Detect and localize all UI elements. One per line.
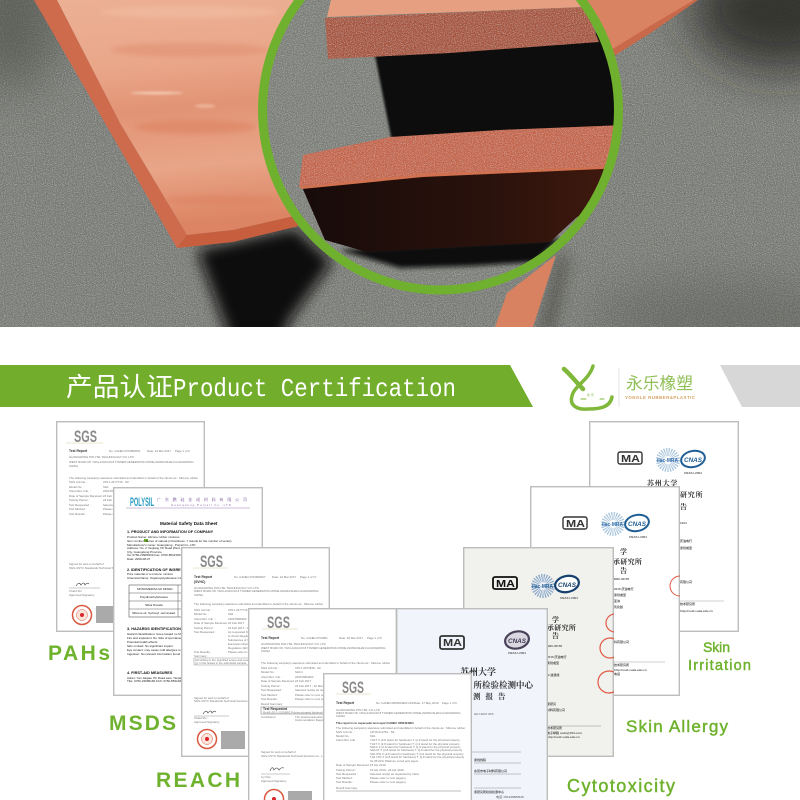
certificate: SGS report 4: Client Ref. Info. : <box>261 675 283 679</box>
certificate: REACH SGS report: Testing Period : <box>194 626 214 630</box>
certificate: skin allergy report: 2016 庆油电行 <box>614 586 634 591</box>
certificate: SGS report 5: LIP19-212761 - SZ <box>370 730 395 734</box>
certificate: SGS report 4: CP17-2077848 - SZ <box>295 666 321 670</box>
certificate: REACH SGS report: CP17-2477716 - SZ <box>228 608 254 612</box>
certificate: SGS report 5 <box>323 673 472 800</box>
certificate: skin irritation report: 苏州大学 <box>647 478 678 488</box>
black shadow between foam sheets <box>374 31 614 137</box>
certificate: MSDS sheet: Chemical Name: Organopolysiloxane mixture <box>127 576 188 580</box>
certificate: MSDS sheet: TEL: 0760-23989160 FAX: 0760-85321801 <box>127 679 185 683</box>
certificate: SGS report 4: Date of Sample Received : <box>261 679 296 683</box>
logo chinese name: 永乐橡塑 <box>626 374 693 393</box>
lower foam sheet <box>299 125 625 189</box>
certificate: REACH SGS report: CHINA <box>194 593 203 597</box>
certificate: SGS report 4: Model No. : <box>261 670 276 674</box>
certificate: REACH SGS report: SGS Job No. : <box>194 608 213 612</box>
certificate: MSDS sheet: Item number: Series of natural (x=hardness, Y stands for the number of series) <box>127 539 232 543</box>
certificate: skin irritation report: 素烧成型 <box>680 545 692 550</box>
certificate: MSDS sheet: Ingestion: No relevant information found <box>127 652 181 656</box>
certificate: cytotoxicity front report: 素线线程 <box>474 757 486 762</box>
heading banner <box>0 365 533 407</box>
sheet shadow <box>197 228 332 345</box>
certificate: PAHs SGS report: Test Requested : <box>69 503 91 507</box>
certificate: REACH SGS report: (y) in the tested in the submitted sample. <box>195 661 247 665</box>
certificate: SGS report 4: Test Requested <box>263 707 287 711</box>
label: Skin Irritation: Skin <box>703 639 730 655</box>
certificate: PAHs SGS report: WEST ROAD OF YAN,HUAN,NO.8 TOWER GENERATION ZONE,ZHONGSHAN,GUANGDONG <box>69 460 194 464</box>
certificate: SGS report 5: Client Ref. Info. : <box>336 738 358 742</box>
certificate: SGS report 5: TH1 LTR X (2-8 stand for hardness) T, Q-9 stand for the physical property <box>370 755 465 759</box>
certificate: PAHs SGS report: Date: 24 Mar 2017 <box>147 449 171 453</box>
certificate: SGS report 4: Test Requested : <box>261 688 283 692</box>
certificate: SGS report 4: Test Method : <box>261 693 279 697</box>
certificate: MSDS sheet: Address: No. 2 Yanjiang 7th Road West, Yanjiang Industrial Zone, Zhongshan <box>127 546 230 550</box>
certificate: MSDS sheet: Polydimethylsiloxane <box>140 595 168 599</box>
certificate: cytotoxicity background report: 学 <box>552 615 559 624</box>
certificate: skin allergy report: 告 <box>620 566 627 575</box>
certificate: skin irritation report: 研究所 <box>680 490 703 499</box>
certificate: SGS report 4: Approved Signatory <box>261 779 287 783</box>
certificate: SGS report 5: SH1G X (2-8 stand for hardness) T, Q-9 stand for the physical property <box>370 745 461 749</box>
certificate: PAHs SGS report: Signed for and on behalf of <box>69 562 104 566</box>
certificate: SGS report 4: The following sample(s) was/were submitted and identified in behalf of the clients as : Silicone rubber <box>261 661 390 665</box>
certificate: REACH SGS report: SGS-CSTC Standards Technical Services Co., Ltd <box>194 699 259 703</box>
certificate: PAHs SGS report: Test Report <box>69 449 88 453</box>
accreditation marks: ilac-MRA <box>657 458 678 464</box>
certificate: PAHs SGS report: CP17-2477716 - SZ <box>103 480 129 484</box>
certificate: SGS report 5: YH1T X (2-8 stand for hardness) T, Q-9 stand for the physical property <box>370 738 460 742</box>
certificate: SGS report 4: SGS Job No. : <box>261 666 280 670</box>
certificate: MSDS sheet: 2. IDENTIFICATION OF INGREDIENTS <box>127 568 195 572</box>
certificate: PAHs SGS report: Please refer to next <box>103 507 128 511</box>
certificate: MSDS sheet: Silicone oil, hydroxyl -terminated <box>132 611 176 615</box>
strip shadow <box>538 255 570 335</box>
certificate: SGS report 5: Date: 27 May 2019 <box>414 701 439 705</box>
accreditation marks <box>493 574 580 600</box>
certificate: REACH SGS report: Regulation (EC) No 1907/2006 <box>228 646 268 650</box>
certificate: SGS report 5: Please refer to next page(s) <box>370 776 406 780</box>
certificate: SGS report 4: Please refer to next pages <box>295 697 329 701</box>
label: Skin Irritation: Irritation <box>688 658 751 674</box>
certificate: PAHs SGS report: Chaid Shi <box>69 589 82 593</box>
certificate: SGS report 4: Test Report <box>261 636 280 640</box>
certificate: skin allergy report: M20-40155 <box>614 577 630 581</box>
certificate: REACH SGS report: Model No. : <box>194 612 209 616</box>
label: Cytotoxicity: Cytotoxicity <box>567 776 675 796</box>
certificate: skin allergy report: 科有限公司 <box>614 639 629 644</box>
certificate: SGS report 4: Result Summary <box>261 702 283 706</box>
label: PAHs: PAHs <box>48 642 110 665</box>
certificate: cytotoxicity background report: 2016 庆油电行 <box>547 654 567 659</box>
certificate: MSDS sheet: POLYSIL <box>130 497 154 509</box>
certificate: MSDS sheet: 4. FIRST-AID MEASURES <box>127 671 173 675</box>
magnifier lens: foam cross-section close-up <box>250 0 630 300</box>
accreditation marks: CNAS <box>628 521 647 528</box>
certificate: MSDS sheet: 广东鹏硅化成材料有限公司 <box>157 496 247 502</box>
certificate: SGS report 4: No. CANEC1703961 <box>301 636 328 640</box>
certificate: SGS report 4 <box>248 608 396 800</box>
certificate: SGS report 4: Signed for and on behalf of <box>261 750 296 754</box>
accreditation marks: CNAS <box>508 638 527 645</box>
accreditation marks: CNAS <box>684 457 703 464</box>
certificate: skin irritation report: 庆油电行 <box>680 538 692 543</box>
certificate: PAHs SGS report <box>56 421 205 632</box>
certificate: SGS report 4: SH1U <box>295 670 303 674</box>
certificate: SGS report 5: Selected test(s) as requested by client <box>370 772 419 776</box>
certificate: SGS report 5: Date of Sample Received : <box>336 763 371 767</box>
certificate: MSDS sheet <box>113 487 263 696</box>
certificate: MSDS sheet: City, Guangdong Province <box>127 550 162 554</box>
certificate: PAHs SGS report: SH1 <box>103 485 109 489</box>
certificate: SGS report 4: Ivy Pan <box>261 775 271 779</box>
certificate: PAHs SGS report: CHINA <box>69 464 78 468</box>
product photo: silicone foam sheets on grey surface <box>0 0 800 360</box>
certificate: SGS report 5: Please refer to next page(s) <box>370 780 406 784</box>
banner title latin: Product Certification <box>173 374 456 404</box>
certificate: REACH SGS report: WEST ROAD OF YAN,HUAN,NO.8 TOWER GENERATION ZONE,ZHONGSHAN,GUANGDONG <box>194 589 319 593</box>
certificate: SGS report 4: RoHS (EU) 2015/863 Polybrominated biphenyl <box>263 710 323 714</box>
label: Skin Irritation <box>688 639 751 674</box>
certificate: REACH SGS report: 2200 8005460 <box>228 617 247 621</box>
certificate: SGS report 5: SH1 <box>370 734 376 738</box>
accreditation marks <box>618 449 706 475</box>
certificate: PAHs SGS report: Date of Sample Received : <box>69 494 104 498</box>
certificate: PAHs SGS report: 24 Feb 2017 <box>103 494 120 498</box>
certificate: cytotoxicity front report: 电话: 051265880628 <box>496 794 524 799</box>
certificate: skin irritation report: 有限公司 <box>680 579 692 584</box>
certificate: SGS report 4: Please refer to next pages <box>295 693 329 697</box>
certificate: SGS report 5: Page 1 of 6 <box>442 701 457 705</box>
certificate: PAHs SGS report: Model No. : <box>69 485 84 489</box>
accreditation marks: MA <box>566 519 585 530</box>
certificate: skin allergy report: 技术研究所 <box>614 662 629 667</box>
certificate: SGS report 5: Test Method : <box>336 776 354 780</box>
lower foam sheet dark side <box>302 166 625 252</box>
top right sheet <box>585 0 698 56</box>
certificate: SGS report 4: Date: 02 Mar 2017 <box>339 636 363 640</box>
certificate: MSDS sheet: Pure material or a mixture: mixture <box>127 572 173 576</box>
certificate: SGS report 4: 2200 8004464 <box>295 675 314 679</box>
certificate: SGS report 5: WEST ROAD OF YAN,HUAN,NO.8 TOWER GENERATION ZONE,ZHONGSHAN,GUANGDONG <box>336 711 461 715</box>
certificate: SGS report 5: 15 Apr 2019 <box>370 763 386 767</box>
certificate: MSDS sheet: Adres: Yan Jiaqiao 7th Road east, Yanjiang Industrial Zone <box>127 676 205 680</box>
top foam sheet <box>325 0 599 59</box>
certificate: PAHs SGS report: SGS-CSTC Standards Technical Services Co. <box>69 566 128 570</box>
large orange sheet <box>34 0 310 248</box>
certificate: SGS report 5: Model No. : <box>336 734 351 738</box>
certificate: PAHs SGS report: Please refer to next <box>103 512 128 516</box>
certificate: cytotoxicity background report: 材料有限公司 <box>547 707 565 712</box>
certificate: skin allergy report: 学 <box>620 547 627 556</box>
certificate: REACH SGS report: Page 1 of 17 <box>300 575 317 579</box>
certificate: REACH SGS report: (SVHC) <box>194 580 205 584</box>
certificate: SGS report 4: The tested parameters comply <box>295 715 335 719</box>
certificate: MSDS sheet: Fire and explosion: No risks of spontaneous combustion <box>127 636 202 640</box>
certificate: PAHs SGS report: Approved Signatory <box>69 593 95 597</box>
lower dark face shadow <box>340 238 560 268</box>
certificate: REACH SGS report <box>181 547 330 757</box>
certificate: skin irritation report: http://ssdi.suda.edu.cn <box>680 609 713 613</box>
company logo <box>564 366 696 409</box>
certificate: REACH SGS report: The following sample(s) was/were submitted and identified in behalf of the clients as : Silicone rubber <box>194 602 323 606</box>
certificate: SGS report 5: SH1 PW X (2-8 stand for hardness) T, Q-9 stand for the physical property <box>370 752 464 756</box>
accreditation marks: CNAS L2004 <box>629 535 647 539</box>
certificate: cytotoxicity front report: 苏州大学 <box>460 666 496 677</box>
certificate: skin irritation report <box>589 421 739 632</box>
certificate: SGS report 4: Conclusion: <box>261 715 276 719</box>
company logo: 永 乐 <box>587 392 594 397</box>
certificate: MSDS sheet: Potential health effects: <box>127 640 158 644</box>
certificate: REACH SGS report: Date of Sample Received : <box>194 621 229 625</box>
label: Skin Allergy: Skin Allergy <box>626 717 728 736</box>
certificate: MSDS sheet: Silica Dioxide <box>145 603 163 607</box>
logo mark <box>564 366 612 409</box>
lower strip <box>495 255 556 327</box>
certificate: SGS report 4: GUANGDONG POLYSIL TECHNOLOGY CO.,LTD <box>261 642 326 646</box>
certificate: SGS report 5: SH1GT X (2-8 stand for hardness) T, Q-9 stand for the physical property <box>370 748 463 752</box>
certificate: PAHs SGS report: GUANGDONG POLYSIL TECHNOLOGY CO.,LTD <box>69 455 134 459</box>
accreditation marks: MA <box>621 454 640 465</box>
certificate: MSDS sheet: Product Name: silicone rubber mixtures <box>127 535 180 539</box>
certificate: SGS report 4: 24 Feb 2017 <box>295 679 312 683</box>
certificate: PAHs SGS report: Test Results : <box>69 512 87 516</box>
certificate: skin allergy report: http://ssdi.suda.edu.cn <box>614 668 647 672</box>
certificate: cytotoxicity front report: 测报告 <box>473 691 510 701</box>
certificate: SGS report 4: Test Results : <box>261 697 279 701</box>
certificate: cytotoxicity background report: 告 <box>552 631 559 640</box>
certificate: SGS report 4: 24 Feb 2017 - 02 Mar 2017 <box>295 684 330 688</box>
certificate: PAHs SGS report: Client Ref. Info. : <box>69 489 91 493</box>
certificate: REACH SGS report: As requested by client, for details <box>228 630 271 634</box>
certificate: PAHs SGS report: The following sample(s) was/were submitted and identified in behalf of the clients as : Silicone rubber <box>69 476 198 480</box>
certificate: SGS report 5: 15 Apr 2019 - 24 Apr 2019 <box>370 768 404 772</box>
certificate: SGS report 5: Test Requested : <box>336 772 358 776</box>
certificate: REACH SGS report: Test Results : <box>194 650 212 654</box>
certificate: MSDS sheet: Date: 2009-08-07 <box>127 557 151 561</box>
sheet surface streaks <box>110 8 272 202</box>
certificate: REACH SGS report: Approved Signatory <box>194 720 220 724</box>
certificate: skin irritation report: 技术研究所 <box>680 601 695 606</box>
certificate: MSDS sheet: 1. PRODUCT AND INFORMATION OF COMPANY <box>127 530 214 534</box>
certificate: cytotoxicity front report: GFJ 2047 3XX <box>474 712 494 716</box>
certificate: PAHs SGS report: Selected test(s) <box>103 503 123 507</box>
certificate: cytotoxicity background report: http://ssdi.suda.edu.cn <box>547 735 580 739</box>
certificate: skin irritation report: 1224 <box>680 521 687 525</box>
certificate: SGS report 5: TH1T X (2-8 stand for hardness) T, Q-9 stand for the physical property <box>370 742 460 746</box>
certificate: cytotoxicity background report: 技术研究所 <box>547 725 562 730</box>
certificate: skin allergy report: 电话 <box>614 671 620 676</box>
certificate: SGS report 5: Result Summary <box>336 786 358 790</box>
certificate: skin irritation report: 告 <box>680 502 687 511</box>
certificate: PAHs SGS report: SGS <box>74 427 97 446</box>
certificate: PAHs SGS report: Test Method : <box>69 507 87 511</box>
accreditation marks: ilac-MRA <box>602 522 623 528</box>
accreditation marks: CNAS <box>558 582 577 589</box>
certificate: SGS report 4: Page 1 of 5 <box>367 636 382 640</box>
certificate: REACH SGS report: 24 Feb 2017 - 03 Mar 2017 <box>228 626 263 630</box>
certificate: cytotoxicity front report: 所检验检测中心 <box>473 680 534 690</box>
certificate: MSDS sheet: MONOMER/SI-NO MIXED <box>137 587 173 591</box>
accreditation marks: CNAS L2004 <box>684 471 702 475</box>
certificate: SGS report 5: Testing Period : <box>336 768 356 772</box>
certificate: MSDS sheet: Guangdong Polysil Co.,LTD <box>171 503 232 507</box>
certificate: SGS report 5: SGS Job No. : <box>336 730 355 734</box>
certificate: PAHs SGS report: Testing Period : <box>69 498 89 502</box>
certificate: MSDS sheet: 3. HAZARDS IDENTIFICATION <box>127 627 181 631</box>
certificate: REACH SGS report: Substances of Very High Concern <box>228 638 272 642</box>
certificate: cytotoxicity background report <box>463 547 614 757</box>
certificate: SGS report 5: The following sample(s) was/were submitted and identified in behalf of the clients as : Silicone rubber <box>336 726 465 730</box>
certificate: cytotoxicity background report: M 波通线 <box>547 672 559 677</box>
certificate: cytotoxicity front report <box>397 608 548 800</box>
red stamps <box>598 614 624 693</box>
certificate: PAHs SGS report: No. CANEC1703962001 <box>109 449 141 453</box>
certificate: REACH SGS report: No. CANEC1703962007 <box>234 575 266 579</box>
certificate: REACH SGS report: Date: 24 Mar 2017 <box>272 575 296 579</box>
certificate: SGS report 4: SGS-CSTC Standards Technical Services Co., Ltd <box>261 754 326 758</box>
surface shading <box>0 0 800 360</box>
grey corner shape <box>720 365 800 407</box>
certificate: cytotoxicity background report: 素烧成型 <box>547 660 559 665</box>
certificate: cytotoxicity front report: 东莞市电子材料有限公司 <box>474 768 507 773</box>
certificate: REACH SGS report: Please refer to next pages <box>228 650 262 654</box>
certificate: SGS report 4: SGS <box>267 613 290 632</box>
certificate: REACH SGS report: European Chemicals Agency <box>228 642 266 646</box>
accreditation marks: MA <box>496 579 515 590</box>
accreditation marks: CNAS L2004 <box>508 651 526 655</box>
certificate: REACH SGS report: GUANGDONG POLYSIL TECHNOLOGY CO.,LTD <box>194 586 259 590</box>
accreditation marks <box>563 513 650 539</box>
certificate: REACH SGS report: SH1 <box>228 612 234 616</box>
certificate: PAHs SGS report: 2200 8005460 <box>103 489 122 493</box>
certificate: REACH SGS report: According to the specified scope and evaluation <box>195 658 257 662</box>
certificate: cytotoxicity front report: 素研究所检验检测中心 <box>474 789 504 794</box>
certificate: SGS report 5: SL 85 AVG Platinum cured poly agent <box>370 759 418 763</box>
accreditation marks: ilac-MRA <box>532 584 553 590</box>
certificate: skin allergy report: 承研究所 <box>613 557 642 566</box>
certificate: REACH SGS report: Test Requested : <box>194 630 216 634</box>
certificate: REACH SGS report: Test Report <box>194 575 213 579</box>
certificate: skin allergy report: 亚洲 <box>614 599 620 603</box>
certificate: PAHs SGS report: Page 1 of 6 <box>175 449 190 453</box>
label: REACH: REACH <box>156 769 240 792</box>
certificate: MSDS sheet: Material Safety Data Sheet <box>160 521 218 526</box>
certificate: REACH SGS report: Client Ref. Info. : <box>194 617 216 621</box>
accreditation marks: MA <box>443 638 462 649</box>
accreditation marks: CNAS L2004 <box>560 596 578 600</box>
certificate: SGS report 5: SGS <box>342 678 364 697</box>
certificate: cytotoxicity background report: 承研究所 <box>547 623 576 632</box>
certificate: SGS report 5: CHINA <box>336 714 345 718</box>
certificate: cytotoxicity background report: M20-40155 <box>547 644 563 648</box>
certificate: MSDS sheet: Manufacturer's name: Guangdong , Polysil Co.,LTD <box>127 543 196 547</box>
certificate: SGS report 4: CHINA <box>261 649 270 653</box>
certificate: SGS report 5: Test Results : <box>336 780 354 784</box>
logo english name: YONGLE RUBBER&PLASTIC <box>625 395 696 400</box>
banner title: 产品认证 <box>66 372 173 402</box>
certificate: skin allergy report: 素烧成型 <box>614 592 626 597</box>
certificate: MSDS sheet: Skin contact: No significant impact <box>127 644 173 648</box>
certificate: SGS report 5: This report is to supersede test report CANEC 0505424904 <box>336 721 414 725</box>
certificate: skin allergy report: 乳化胶 <box>614 604 623 609</box>
certificate: PAHs SGS report: 24 Feb 2017 - 02 Mar <box>103 498 131 502</box>
certificate: cytotoxicity background report: 电子邮箱 suda@163.com <box>547 730 582 735</box>
certificate: REACH SGS report: Summary : <box>194 654 208 658</box>
certificate: REACH SGS report: Chaid Shi <box>194 716 207 720</box>
certificate: SGS report 4: Testing Period : <box>261 684 281 688</box>
certificate: REACH SGS report: SGS <box>200 552 223 571</box>
certificate: MSDS sheet: Hazard classification: Goes toward no MSDS <box>127 632 187 636</box>
certificate: SGS report 5: GUANGDONG POLYSIL CO.,LTD <box>336 708 380 712</box>
certificate: REACH SGS report: Signed for and on behalf of <box>194 696 229 700</box>
certificate: MSDS sheet: Eye contact: may cause mild allergies to eye <box>127 648 187 652</box>
certificate: PAHs SGS report: SGS Job No. : <box>69 480 88 484</box>
certificate: SGS report 4: Instrumentation Regulated <box>295 718 329 722</box>
certificate: MSDS sheet: Tel: 0760-23989160 Fax: 0760-85321801 <box>127 553 182 557</box>
certificate: cytotoxicity background report: 素研究 <box>547 701 556 706</box>
certificate: skin allergy report <box>530 486 680 696</box>
certificate: SGS report 5: Test Report <box>336 701 355 705</box>
certificate: REACH SGS report: to check Regulation (EC) No 1907/2006 <box>228 634 279 638</box>
accreditation marks <box>440 629 531 655</box>
certificate: SGS report 4: Selected test(s) as requested <box>295 688 333 692</box>
label: MSDS: MSDS <box>109 712 176 735</box>
certificate: SGS report 5: No. CANEC1605624904 2017 <box>376 701 415 705</box>
certificate: SGS report 4: WEST ROAD OF YAN,HUAN,NO.8 TOWER GENERATION ZONE,ZHONGSHAN,GUANGDONG <box>261 646 386 650</box>
certificate: REACH SGS report: 24 Feb 2017 <box>228 621 245 625</box>
